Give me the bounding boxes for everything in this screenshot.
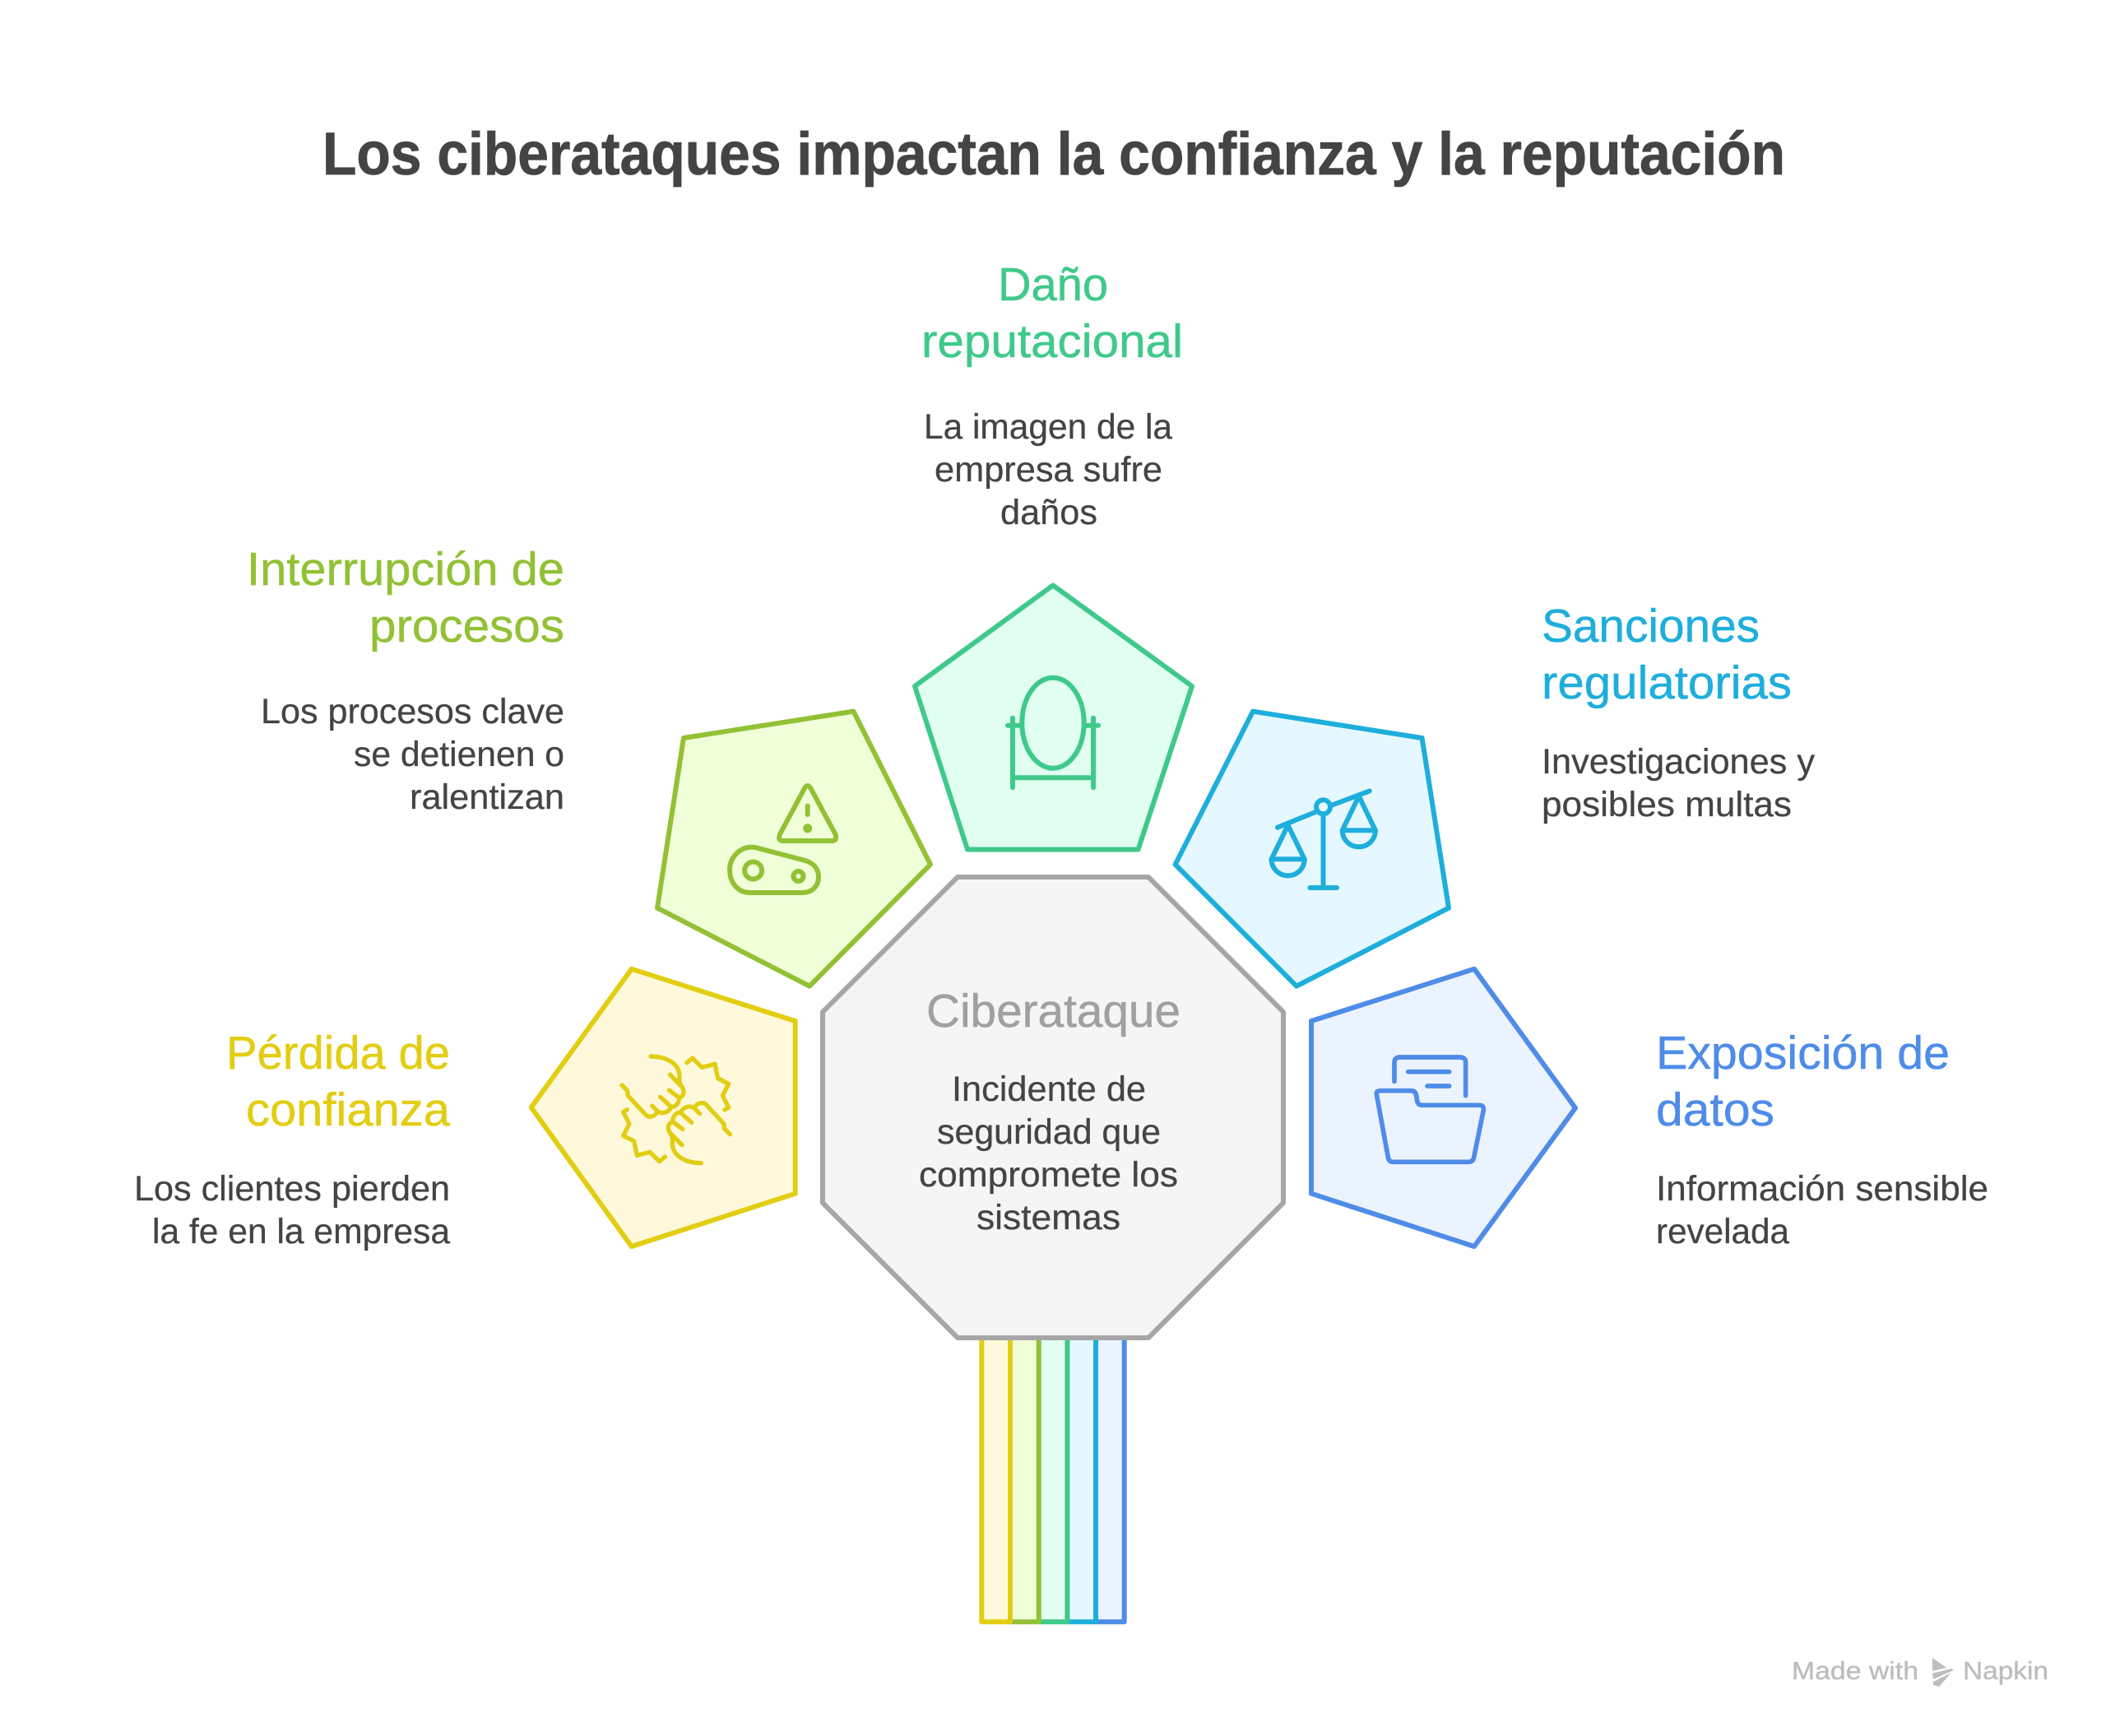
text: Exposición description: revelada <box>1656 1212 1789 1251</box>
watermark: Made with Napkin <box>1792 1656 2048 1687</box>
text: Interrupción description: ralentizan <box>410 777 564 817</box>
heading: Sanciones regulatorias: regulatorias <box>1542 657 1792 709</box>
heading: Daño reputacional: Daño <box>998 258 1108 311</box>
text: Exposición description: Información sensible <box>1656 1169 1988 1209</box>
icon: scales <box>1272 791 1375 888</box>
icon: mirror <box>1008 678 1098 787</box>
text: Interrupción description: se detienen o <box>354 735 564 774</box>
heading: Sanciones regulatorias <box>1542 600 1792 709</box>
heading: Sanciones regulatorias: Sanciones <box>1542 600 1760 652</box>
title: Los ciberataques impactan la confianza y la reputación <box>322 121 1785 188</box>
text: Daño reputacional description: empresa sufre <box>935 450 1162 490</box>
heading: Exposición de datos: datos <box>1656 1084 1774 1136</box>
icon: Napkin logo <box>1932 1658 1954 1687</box>
text: Sanciones description: posibles multas <box>1542 785 1792 824</box>
heading: Daño reputacional <box>921 258 1183 368</box>
panel: blue pentagon <box>1311 969 1575 1246</box>
panel: centre octagon <box>823 877 1283 1338</box>
icon: folder with document <box>1376 1057 1483 1162</box>
text: Daño reputacional description <box>924 407 1172 532</box>
text: centre description: compromete los <box>919 1155 1178 1195</box>
icon: warning and conveyor belt <box>730 786 836 893</box>
text: Interrupción description <box>261 692 564 817</box>
text: centre description: Incidente de <box>952 1070 1146 1109</box>
heading: Interrupción de procesos: procesos <box>369 600 564 652</box>
heading: Interrupción de procesos <box>247 543 564 652</box>
panel: mint pentagon <box>915 585 1192 849</box>
heading: Pérdida de confianza: Pérdida de <box>226 1027 450 1079</box>
heading: Ciberataque: Ciberataque <box>926 985 1181 1037</box>
label: Pérdida de confianza <box>134 1027 450 1251</box>
text: Pérdida description: Los clientes pierden <box>134 1169 450 1209</box>
label: Interrupción de procesos <box>247 543 564 817</box>
text: centre description: sistemas <box>976 1198 1120 1237</box>
text: Exposición description <box>1656 1169 1988 1251</box>
text: centre description: seguridad que <box>937 1112 1161 1152</box>
panel: lime pentagon <box>657 712 930 986</box>
heading: Interrupción de procesos: Interrupción de <box>247 543 564 596</box>
text: Pérdida description: la fe en la empresa <box>152 1212 450 1251</box>
label: Exposición de datos <box>1656 1027 1988 1251</box>
heading: Daño reputacional: reputacional <box>921 315 1183 368</box>
panel: sky pentagon <box>1176 712 1449 986</box>
text: Sanciones description <box>1542 742 1815 824</box>
text: Daño reputacional description: La imagen de la <box>924 407 1172 447</box>
text: Pérdida description <box>134 1169 450 1251</box>
heading: Exposición de datos <box>1656 1027 1950 1136</box>
label: Sanciones regulatorias <box>1542 600 1815 824</box>
panel: yellow pentagon <box>531 969 796 1246</box>
text: centre description <box>919 1070 1178 1237</box>
watermark: Made with Napkin: Napkin <box>1963 1656 2048 1685</box>
heading: Pérdida de confianza <box>226 1027 450 1136</box>
label: Daño reputacional <box>921 258 1183 532</box>
stem: coloured stripes <box>981 1316 1125 1622</box>
text: Sanciones description: Investigaciones y <box>1542 742 1815 782</box>
heading: Pérdida de confianza: confianza <box>246 1084 450 1136</box>
watermark: Made with Napkin: Made with <box>1792 1656 1918 1685</box>
icon: broken handshake <box>622 1056 730 1163</box>
text: Interrupción description: Los procesos clave <box>261 692 564 731</box>
text: Daño reputacional description: daños <box>1000 493 1097 532</box>
heading: Exposición de datos: Exposición de <box>1656 1027 1950 1079</box>
